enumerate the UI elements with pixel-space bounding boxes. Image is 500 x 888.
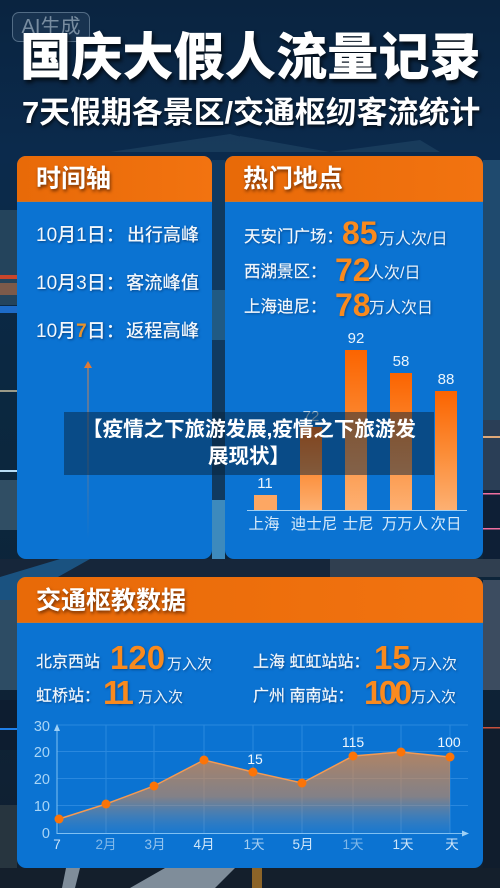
bar chart bbox=[247, 330, 467, 533]
line chart: 10 bbox=[34, 799, 50, 815]
place: West Lake: 72 bbox=[335, 252, 371, 288]
stat: Beijing West bbox=[36, 639, 213, 676]
panel: popular places bbox=[225, 156, 483, 559]
bar chart: 士尼 bbox=[342, 515, 374, 533]
stat: Hongqiao: 11 bbox=[103, 674, 130, 711]
line chart: 15 bbox=[247, 751, 263, 767]
transport header bbox=[17, 577, 483, 623]
stat: Guangzhou South: 广州 南南站： bbox=[253, 688, 353, 705]
timeline header bbox=[17, 156, 212, 202]
stat: Shanghai Hongqiao: 上海 虹虹站站： bbox=[253, 654, 369, 671]
line chart: 20 bbox=[34, 745, 50, 761]
transport header: 交通枢教数据 bbox=[36, 587, 186, 615]
stat: Guangzhou South: 万入次 bbox=[411, 689, 456, 706]
line chart: 1天 bbox=[342, 837, 364, 852]
bar chart: 88 bbox=[438, 371, 454, 388]
stat: Guangzhou South bbox=[253, 674, 457, 711]
line chart: 30 bbox=[34, 719, 50, 735]
stat: Shanghai Hongqiao bbox=[253, 639, 458, 676]
line chart bbox=[34, 719, 469, 852]
timeline entry 1: 出行高峰 bbox=[127, 225, 199, 245]
timeline entry 3: 10月7日： bbox=[36, 321, 125, 342]
stat: Beijing West: 万入次 bbox=[167, 656, 212, 673]
badge: AI generated: AI生成 bbox=[22, 16, 80, 38]
line chart: 天 bbox=[445, 837, 459, 852]
overlay banner: 展现状】 bbox=[208, 445, 290, 468]
line chart: 5月 bbox=[292, 837, 314, 852]
line chart: 3月 bbox=[144, 837, 166, 852]
subtitle: 7天假期各景区/交通枢纫客流统计 bbox=[22, 95, 480, 130]
timeline entry 2: 10月3日： bbox=[36, 273, 125, 294]
stat: Shanghai Hongqiao: 15 bbox=[374, 639, 411, 676]
places header: 热门地点 bbox=[243, 165, 343, 193]
line chart: 100 bbox=[437, 734, 461, 750]
timeline entry 1 bbox=[36, 225, 200, 246]
line chart: 0 bbox=[42, 826, 50, 842]
place: Shanghai Disney: 78 bbox=[335, 287, 371, 323]
place: Tiananmen: 天安门广场： bbox=[244, 228, 343, 246]
timeline header: 时间轴 bbox=[36, 165, 111, 193]
place: West Lake bbox=[244, 252, 420, 288]
bar chart: 次日 bbox=[430, 515, 462, 533]
place: West Lake: 人次/日 bbox=[368, 265, 420, 282]
timeline entry 2 bbox=[36, 272, 200, 294]
line chart: 1天 bbox=[392, 837, 414, 852]
line chart: 1天 bbox=[243, 837, 265, 852]
panel: timeline bbox=[17, 156, 212, 559]
timeline entry 3 bbox=[36, 320, 200, 342]
place: Shanghai Disney: 上海迪尼： bbox=[244, 298, 326, 316]
place: Tiananmen: 85 bbox=[342, 215, 378, 251]
timeline entry 3: 返程高峰 bbox=[126, 320, 199, 341]
panel: transport hubs bbox=[17, 577, 483, 868]
timeline entry 2: 客流峰值 bbox=[126, 272, 199, 293]
place: Tiananmen bbox=[244, 215, 447, 251]
timeline arrow bbox=[84, 361, 92, 532]
badge: AI generated bbox=[12, 12, 90, 42]
places header bbox=[225, 156, 483, 202]
line chart: 2月 bbox=[95, 837, 117, 852]
bar chart: 72 bbox=[303, 408, 319, 425]
line chart: 4月 bbox=[193, 837, 215, 852]
line chart: 7 bbox=[53, 837, 61, 852]
stat: Guangzhou South: 100 bbox=[364, 674, 409, 711]
bar chart: 迪士尼 bbox=[291, 515, 337, 533]
bar chart: 万万人 bbox=[382, 515, 428, 533]
timeline entry 1: 10月1日： bbox=[36, 225, 125, 246]
line chart: 20 bbox=[34, 772, 50, 788]
stat: Beijing West: 120 bbox=[110, 639, 165, 676]
stat: Beijing West: 北京西站 bbox=[36, 654, 100, 671]
line chart: 115 bbox=[342, 734, 364, 750]
place: West Lake: 西湖景区： bbox=[244, 263, 326, 281]
stat: Hongqiao bbox=[36, 674, 184, 711]
place: Shanghai Disney: 万人次日 bbox=[369, 300, 433, 317]
place: Tiananmen: 万人次/日 bbox=[379, 231, 447, 248]
stat: Hongqiao: 虹桥站： bbox=[36, 688, 100, 705]
bar chart: 上海 bbox=[248, 515, 280, 533]
overlay banner bbox=[64, 412, 434, 475]
bar chart: 92 bbox=[348, 330, 364, 347]
stat: Shanghai Hongqiao: 万入次 bbox=[412, 656, 457, 673]
bar chart: 58 bbox=[393, 353, 409, 370]
title: 国庆大假人流量记录 bbox=[20, 29, 481, 86]
overlay banner: 【疫情之下旅游发展,疫情之下旅游发 bbox=[82, 418, 416, 441]
bar chart: 11 bbox=[257, 475, 273, 492]
place: Shanghai Disney bbox=[244, 287, 433, 323]
stat: Hongqiao: 万入次 bbox=[138, 689, 183, 706]
